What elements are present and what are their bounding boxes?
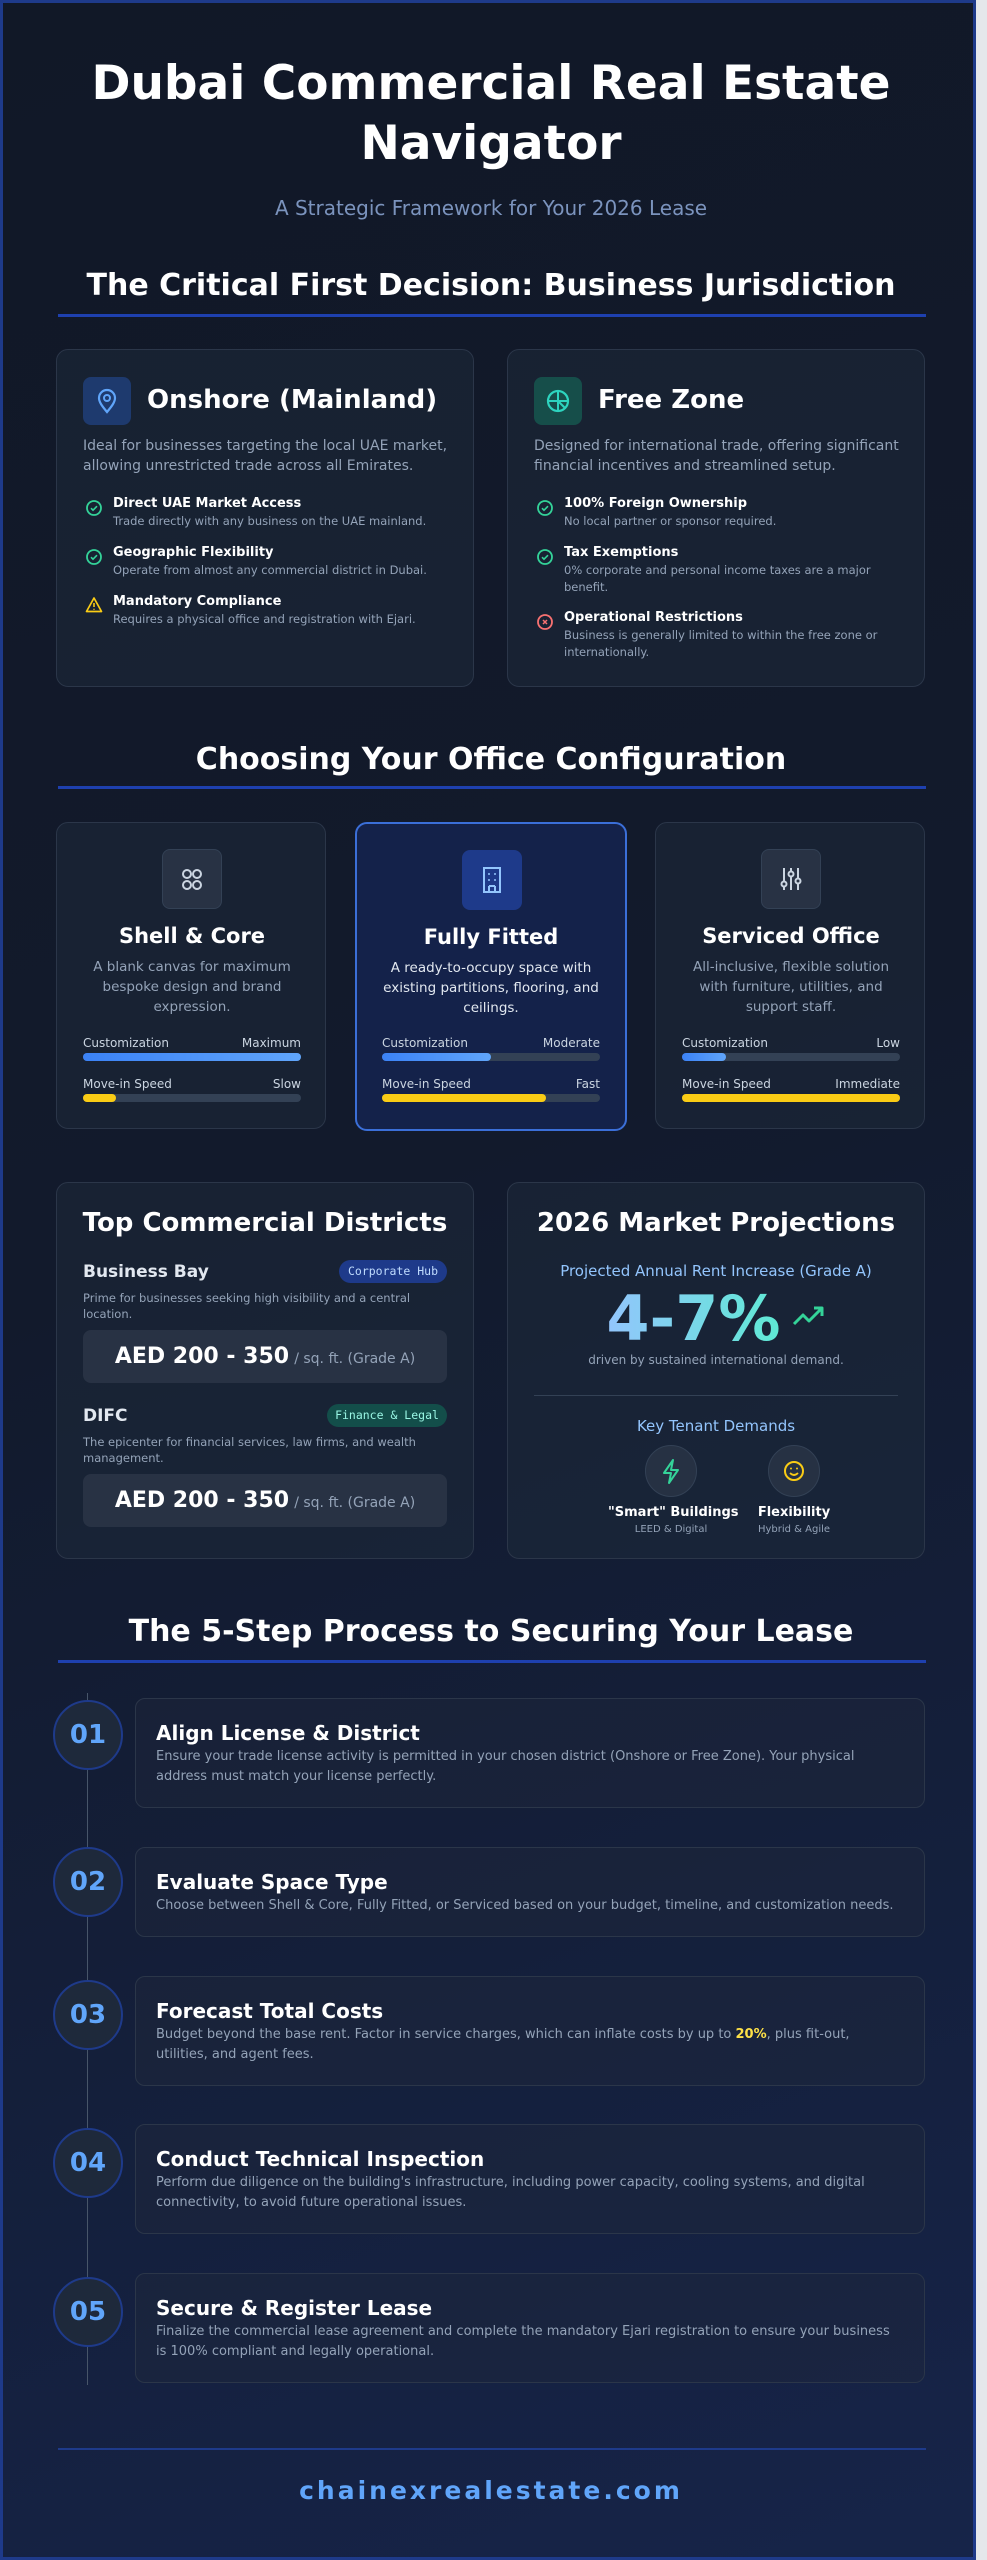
stat label: Projected Annual Rent Increase (Grade A): [560, 1262, 872, 1280]
card: Secure & Register Lease: [156, 2296, 432, 2320]
bars: Customization: [382, 1036, 468, 1050]
description: Designed for international trade, offering significant financial incentives and streamlined setup.: [534, 438, 899, 474]
step 05: 05: [70, 2297, 106, 2327]
stat caption: driven by sustained international demand.: [588, 1353, 844, 1367]
card: [135, 2273, 925, 2383]
bars: Immediate: [835, 1077, 900, 1091]
item: geographic flexibility: Operate from almost any commercial district in Dubai.: [113, 563, 427, 577]
bars: [382, 1036, 600, 1102]
district: DIFC: The epicenter for financial services, law firms, and wealth management.: [83, 1435, 416, 1465]
item: foreign ownership: No local partner or sponsor required.: [564, 514, 776, 528]
number badge: 01: [70, 1720, 106, 1750]
price box: [83, 1330, 447, 1383]
step 04: [53, 2124, 925, 2234]
demand: flexibility: Hybrid & Agile: [758, 1524, 830, 1535]
bars: Low: [876, 1036, 900, 1050]
bars: Slow: [273, 1077, 301, 1091]
heading: Serviced Office: [702, 924, 880, 948]
item: mandatory compliance: Requires a physical office and registration with Ejari.: [113, 612, 416, 626]
description: A ready-to-occupy space with existing partitions, flooring, and ceilings.: [383, 960, 599, 1016]
panel: districts: [56, 1182, 474, 1559]
bars: Customization: [682, 1036, 768, 1050]
card: Conduct Technical Inspection: [156, 2147, 484, 2171]
panel: fully fitted: [355, 822, 627, 1131]
item: geographic flexibility: [86, 545, 427, 577]
card: Choose between Shell & Core, Fully Fitted, or Serviced based on your budget, timeline, and customization needs.: [156, 1898, 894, 1913]
card: [135, 1976, 925, 2086]
bars: [83, 1036, 301, 1102]
bars: Move-in Speed: [682, 1077, 771, 1091]
item: operational restrictions: Operational Restrictions: [564, 610, 743, 625]
title: [91, 56, 891, 171]
item: foreign ownership: [537, 496, 776, 528]
panel: free zone: [507, 349, 925, 687]
panel: shell & core: [56, 822, 326, 1129]
district: DIFC: [82, 1404, 447, 1527]
card: [135, 1698, 925, 1808]
heading: free zone: Free Zone: [598, 385, 744, 415]
item: foreign ownership: 100% Foreign Ownership: [564, 496, 747, 511]
icon: grid: [162, 849, 222, 909]
item: operational restrictions: Business is generally limited to within the free zone or internationally.: [564, 628, 877, 659]
heading: 2026 Market Projections: [537, 1208, 895, 1238]
card: Forecast Total Costs: [156, 1999, 383, 2023]
icon: sliders: [761, 849, 821, 909]
district: business bay: Prime for businesses seeking high visibility and a central location.: [83, 1291, 410, 1321]
price box: AED 200 - 350 / sq. ft. (Grade A): [115, 1488, 415, 1513]
item: direct market access: [86, 496, 426, 528]
icon: globe: [534, 377, 582, 425]
demand: smart buildings: LEED & Digital: [635, 1524, 707, 1535]
heading: Top Commercial Districts: [83, 1208, 447, 1238]
title: Dubai Commercial Real Estate: [91, 56, 891, 111]
step 01: [53, 1698, 925, 1808]
price box: AED 200 - 350 / sq. ft. (Grade A): [115, 1344, 415, 1369]
item: direct market access: Trade directly with any business on the UAE mainland.: [113, 514, 426, 528]
bars: Move-in Speed: [83, 1077, 172, 1091]
card: Evaluate Space Type: [156, 1870, 388, 1894]
step 03: 03: [70, 2000, 106, 2030]
demand: smart buildings: [608, 1445, 739, 1535]
card: [135, 1847, 925, 1937]
panel: market projections: [507, 1182, 925, 1559]
heading: jurisdiction: The Critical First Decision: Business Jurisdiction: [86, 268, 895, 303]
stat: 4-7%: 4-7%: [606, 1282, 781, 1355]
heading: key tenant demands: Key Tenant Demands: [637, 1417, 795, 1435]
timeline line: [87, 1693, 88, 2385]
item: tax exemptions: [537, 545, 871, 594]
district: business bay: Business Bay: [83, 1262, 209, 1282]
step 03: [53, 1976, 925, 2086]
bars: Moderate: [543, 1036, 600, 1050]
badge: Corporate Hub: [348, 1264, 438, 1278]
item: mandatory compliance: [86, 594, 416, 626]
demand: smart buildings: "Smart" Buildings: [608, 1505, 739, 1520]
panel: serviced office: [655, 822, 925, 1129]
description: All-inclusive, flexible solution with furniture, utilities, and support staff.: [693, 959, 889, 1015]
bars: Maximum: [242, 1036, 301, 1050]
heading: office configuration: Choosing Your Office Configuration: [196, 742, 786, 777]
subtitle: A Strategic Framework for Your 2026 Lease: [275, 196, 707, 220]
card: [135, 2124, 925, 2234]
heading: Fully Fitted: [424, 925, 558, 949]
item: tax exemptions: 0% corporate and personal income taxes are a major benefit.: [564, 563, 871, 594]
icon: building: [462, 850, 522, 910]
demand: flexibility: [758, 1445, 830, 1535]
heading: Shell & Core: [119, 924, 265, 948]
card: Ensure your trade license activity is permitted in your chosen district (Onshore or Free Zone). Your physical address must match your license perfectly.: [156, 1749, 854, 1784]
item: geographic flexibility: Geographic Flexibility: [113, 545, 274, 560]
icon: location pin: [83, 377, 131, 425]
description: Ideal for businesses targeting the local UAE market, allowing unrestricted trade across all Emirates.: [83, 438, 447, 474]
bars: Customization: [83, 1036, 169, 1050]
district: DIFC: DIFC: [83, 1406, 128, 1426]
item: operational restrictions: [537, 610, 878, 659]
step 05: [53, 2273, 925, 2383]
item: direct market access: Direct UAE Market Access: [113, 496, 301, 511]
item: mandatory compliance: Mandatory Compliance: [113, 594, 281, 609]
step 04: 04: [70, 2148, 106, 2178]
card: Align License & District: [156, 1721, 420, 1745]
heading: 5-step process: The 5-Step Process to Securing Your Lease: [129, 1614, 853, 1649]
step 02: [53, 1847, 925, 1937]
heading: onshore: Onshore (Mainland): [147, 385, 437, 415]
bars: Fast: [576, 1077, 600, 1091]
demand: flexibility: Flexibility: [758, 1505, 830, 1520]
district: business bay: [83, 1260, 447, 1383]
title: Navigator: [360, 116, 622, 171]
badge: [327, 1404, 447, 1427]
item: tax exemptions: Tax Exemptions: [564, 545, 678, 560]
card: Perform due diligence on the building's infrastructure, including power capacity, cooling systems, and digital connectivity, to avoid future operational issues.: [156, 2175, 865, 2210]
card: Finalize the commercial lease agreement and complete the mandatory Ejari registration to ensure your business is 100% compliant and legally operational.: [156, 2324, 890, 2358]
number badge: [53, 1700, 123, 1770]
description: A blank canvas for maximum bespoke design and brand expression.: [93, 959, 291, 1015]
bars: [682, 1036, 900, 1102]
price box: [83, 1474, 447, 1527]
badge: [339, 1260, 447, 1283]
card: Budget beyond the base rent. Factor in service charges, which can inflate costs by up to 20%, plus fit-out, utilities, and agent fees.: [156, 2027, 850, 2062]
bars: Move-in Speed: [382, 1077, 471, 1091]
badge: Finance & Legal: [335, 1408, 439, 1422]
footer: website: chainexrealestate.com: [299, 2476, 683, 2505]
step 02: 02: [70, 1867, 106, 1897]
panel: onshore: [56, 349, 474, 687]
